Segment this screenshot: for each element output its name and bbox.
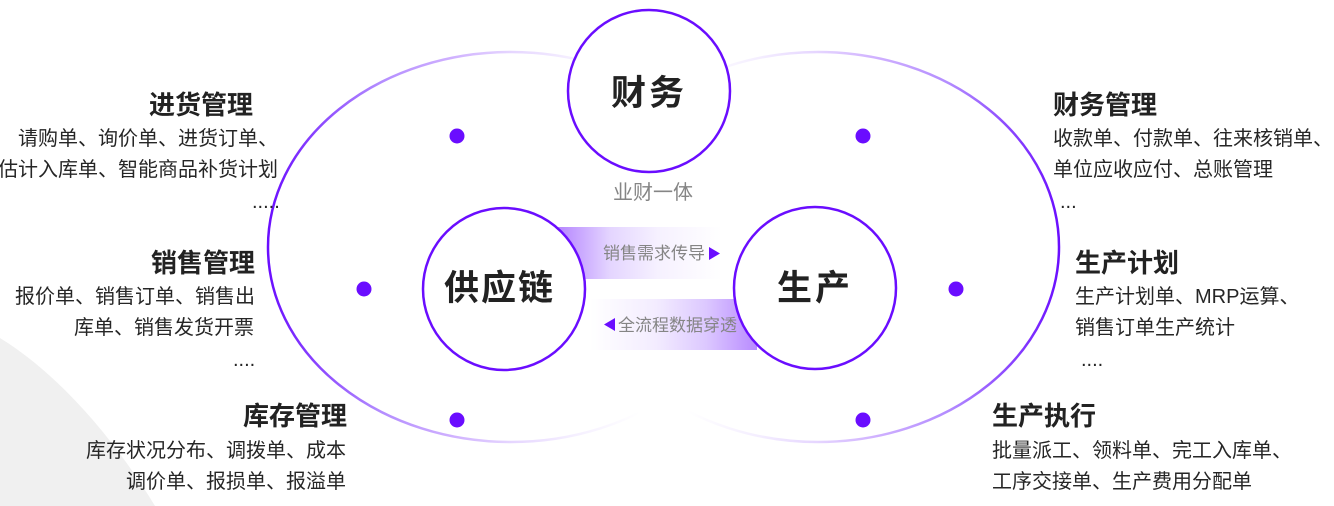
circle label: supply chain: 供应链 <box>444 269 555 308</box>
panel: purchasing <box>0 90 280 213</box>
heading: production execution: 生产执行 <box>992 401 1096 431</box>
circle: finance <box>568 10 730 172</box>
heading: finance management: 财务管理 <box>1053 90 1157 120</box>
arrow left <box>604 318 615 331</box>
text: inventory items line 2: 调价单、报损单、报溢单 <box>126 471 346 493</box>
text: planning items: 生产计划单、MRP运算、 <box>1075 286 1299 308</box>
flow label: sales demand: 销售需求传导 <box>603 244 705 263</box>
right orbit ellipse <box>577 52 1059 442</box>
panel: production execution <box>992 401 1292 493</box>
text: planning ellipsis: .... <box>1081 349 1103 371</box>
text: purchasing ellipsis: ..... <box>252 191 280 213</box>
band: full-process data <box>590 299 757 350</box>
decorative gray corner <box>0 338 155 506</box>
text: sales items: 报价单、销售订单、销售出 <box>15 286 255 308</box>
arrow right <box>709 247 720 260</box>
heading: inventory: 库存管理 <box>243 401 347 431</box>
circle label: production: 生产 <box>777 269 853 308</box>
circle: production <box>734 207 896 369</box>
caption: finance integration: 业财一体 <box>613 182 693 204</box>
panel: sales <box>15 248 255 371</box>
circle: supply chain <box>423 208 585 370</box>
text: sales ellipsis: .... <box>233 349 255 371</box>
node dots <box>356 128 964 428</box>
panel: finance management <box>1053 90 1333 213</box>
text: sales items line 2: 库单、销售发货开票 <box>74 317 254 339</box>
text: execution items: 批量派工、领料单、完工入库单、 <box>992 440 1292 462</box>
band: sales demand <box>556 227 722 279</box>
text: finance items line 2: 单位应收应付、总账管理 <box>1053 159 1273 181</box>
heading: production planning: 生产计划 <box>1075 248 1179 278</box>
heading: sales: 销售管理 <box>151 248 255 278</box>
text: finance items: 收款单、付款单、往来核销单、 <box>1053 128 1333 150</box>
flow label: full-process data: 全流程数据穿透 <box>618 316 737 335</box>
text: finance ellipsis: ... <box>1060 191 1077 213</box>
text: purchasing items line 2: 估计入库单、智能商品补货计划 <box>0 159 278 181</box>
text: purchasing items: 请购单、询价单、进货订单、 <box>18 128 278 150</box>
text: planning items line 2: 销售订单生产统计 <box>1075 317 1235 339</box>
heading: purchasing: 进货管理 <box>149 90 253 120</box>
panel: production planning <box>1075 248 1299 371</box>
left orbit ellipse <box>268 52 754 442</box>
circle label: finance: 财务 <box>611 74 687 113</box>
text: execution items line 2: 工序交接单、生产费用分配单 <box>992 471 1252 493</box>
panel: inventory <box>86 401 347 493</box>
text: inventory items: 库存状况分布、调拨单、成本 <box>86 440 346 462</box>
